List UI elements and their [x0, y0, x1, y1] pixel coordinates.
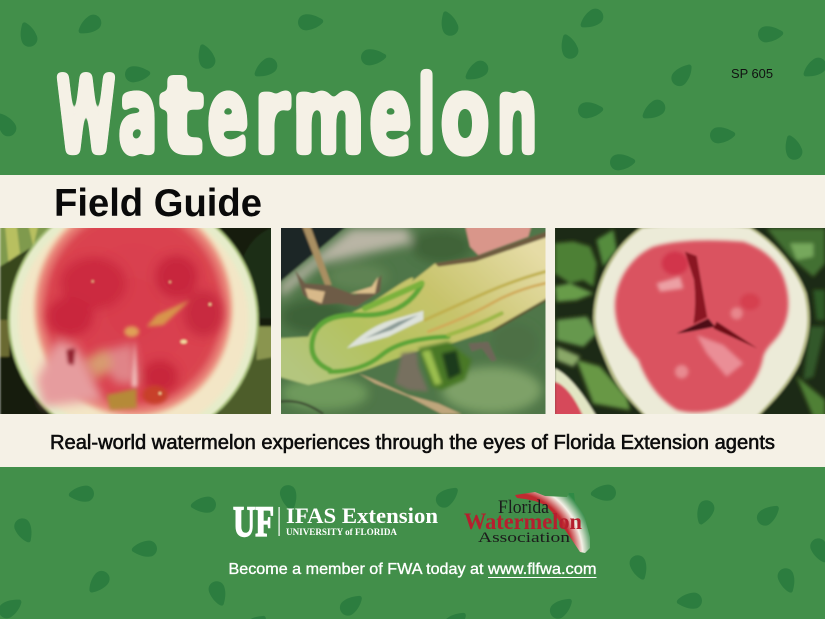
- logo: UF IFAS Extension: IFAS Extension: [286, 503, 438, 528]
- title: Watermelon: n: [496, 54, 538, 179]
- seed pattern bottom: [0, 482, 825, 619]
- cream tagline band: [0, 414, 825, 467]
- subtitle: Field Guide: Field Guide: [54, 182, 262, 225]
- membership call to action: www.flfwa.com: [487, 561, 596, 578]
- title: Watermelon: m: [292, 54, 365, 179]
- title: Watermelon: e: [369, 54, 412, 179]
- logo: UF IFAS Extension: [233, 499, 438, 546]
- title: Watermelon: t: [160, 54, 204, 179]
- photo: hollow watermelon with internal rot: [0, 228, 271, 414]
- bottom green band: [0, 467, 825, 619]
- title: Watermelon: W: [56, 54, 116, 179]
- logo: Florida Watermelon Association: Watermelon: [464, 509, 582, 534]
- membership call to action: [228, 561, 596, 578]
- logo: Florida Watermelon Association: Association: [478, 530, 571, 546]
- logo: Florida Watermelon Association: Florida: [498, 497, 550, 518]
- logo: UF IFAS Extension: UNIVERSITY of FLORIDA: [286, 528, 397, 538]
- membership call to action: Become a member of FWA today at: [228, 561, 484, 578]
- publication number: SP 605: [731, 66, 773, 81]
- photo: split watermelon vine: [278, 223, 548, 420]
- title: Watermelon: r: [254, 54, 290, 179]
- title: Watermelon: o: [440, 54, 490, 179]
- title: Watermelon: [56, 54, 538, 179]
- title: Watermelon: a: [118, 54, 158, 179]
- cream heading band: [0, 175, 825, 228]
- logo: Florida Watermelon Association: [464, 492, 590, 553]
- seed pattern top: [0, 6, 825, 171]
- title: Watermelon: e: [207, 54, 249, 179]
- photo: watermelon with hollow heart crack: [553, 223, 825, 420]
- logo: UF IFAS Extension: UF: [233, 499, 274, 546]
- title: Watermelon: l: [417, 54, 436, 179]
- tagline: Real-world watermelon experiences through the eyes of Florida Extension agents: [50, 432, 775, 454]
- top green band: [0, 0, 825, 175]
